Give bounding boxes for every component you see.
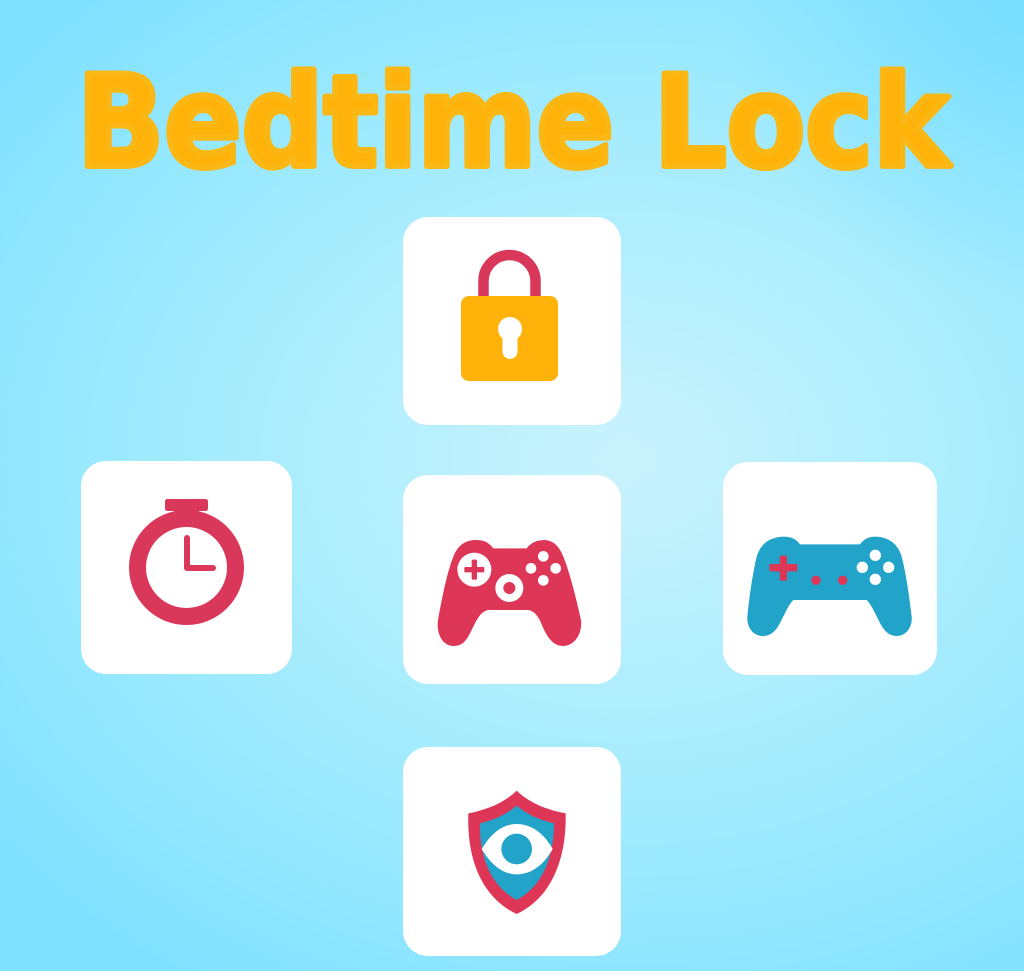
icon: red game controller xyxy=(438,540,581,646)
panel: blue controller xyxy=(723,462,937,675)
title: Bedtime Lock xyxy=(77,48,951,196)
panel: red controller xyxy=(403,475,621,684)
icon: stopwatch xyxy=(138,499,236,616)
panel: lock xyxy=(403,217,621,425)
icon: padlock xyxy=(461,255,558,381)
icon: shield with eye xyxy=(468,791,566,914)
panel: shield xyxy=(403,747,621,956)
icon: blue game controller xyxy=(747,537,912,636)
panel: timer xyxy=(81,461,292,674)
